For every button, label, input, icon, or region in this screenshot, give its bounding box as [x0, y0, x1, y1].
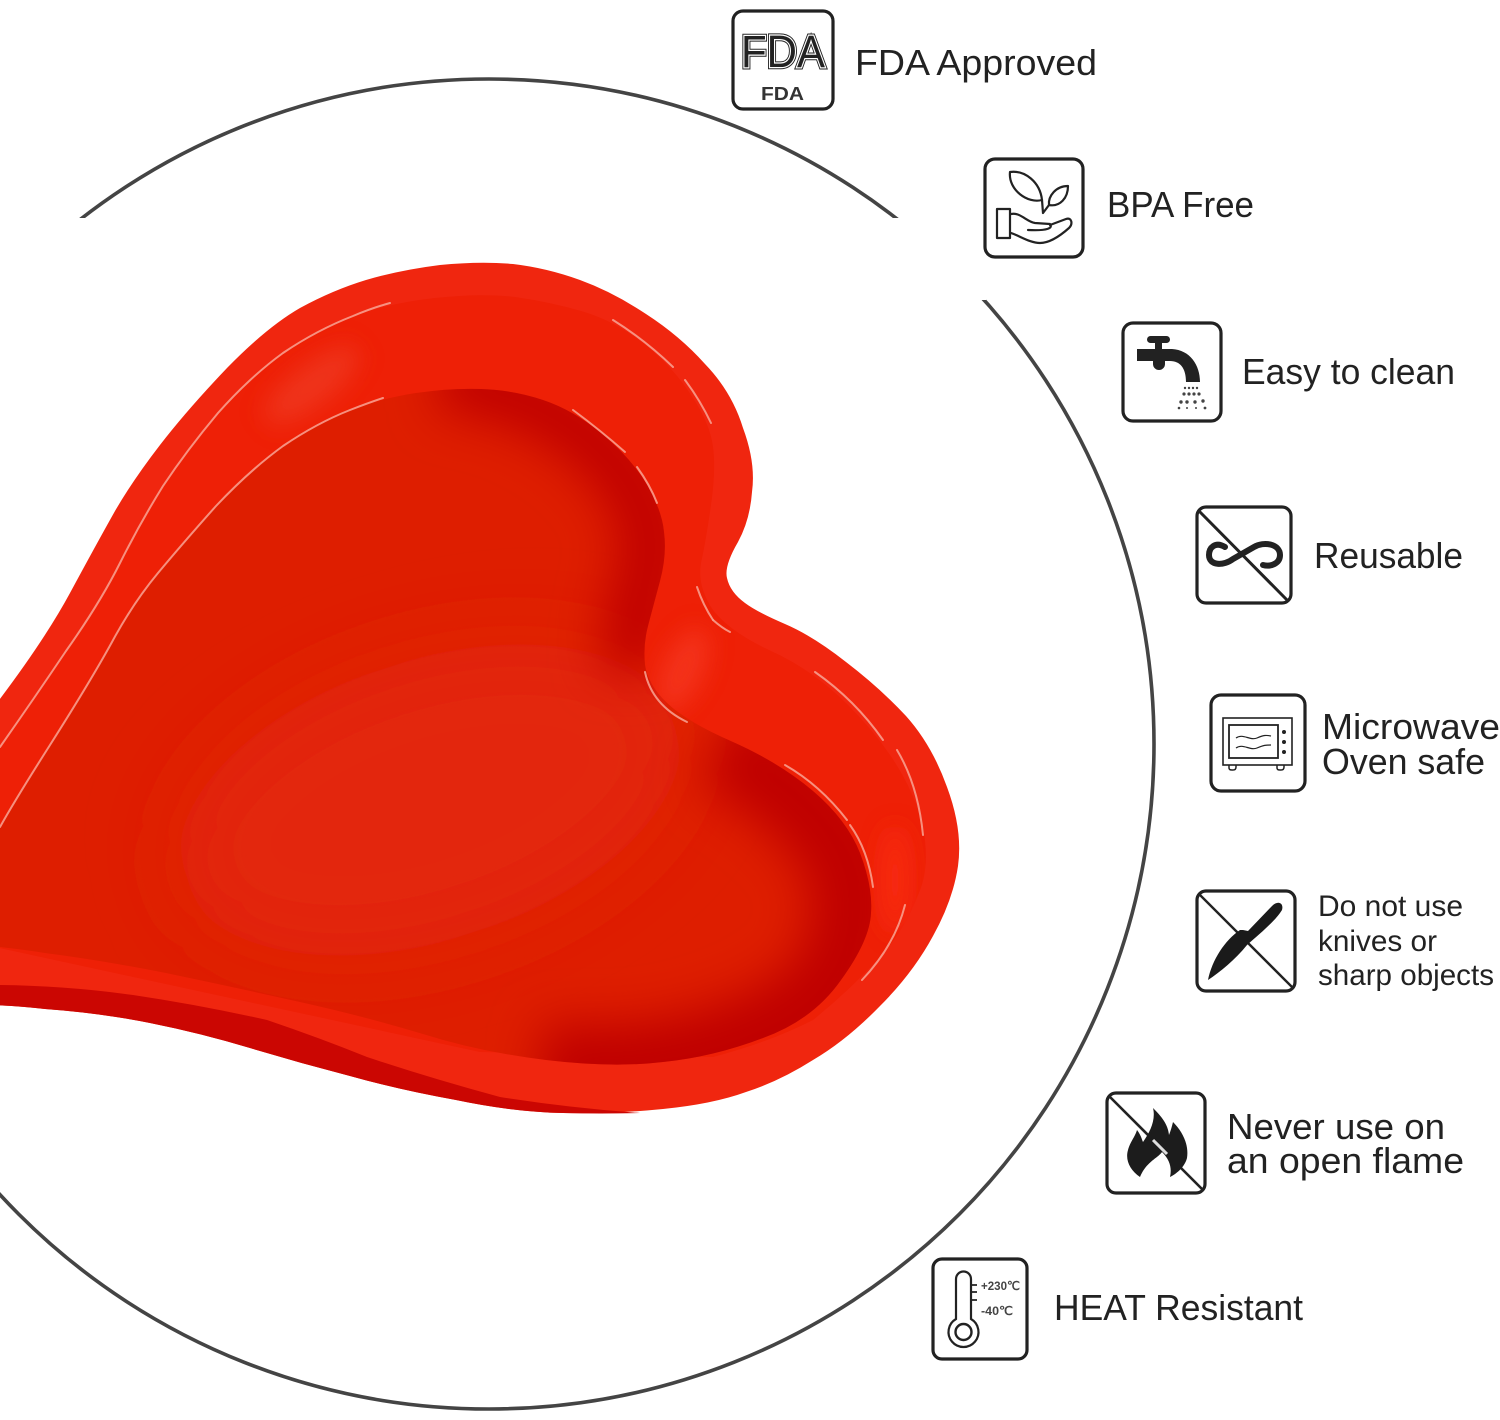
label: FDA Approved	[855, 42, 1097, 83]
label: Do not use	[1318, 890, 1463, 923]
label: sharp objects	[1318, 959, 1494, 992]
feature: HEAT Resistant	[933, 1259, 1303, 1359]
icon: water tap	[1123, 323, 1221, 421]
feature: Never use on an open flame	[1107, 1093, 1464, 1193]
icon: thermometer: +230℃	[981, 1279, 1020, 1293]
label: Microwave	[1322, 706, 1500, 747]
label: Oven safe	[1322, 741, 1485, 782]
white band interrupting the circle	[0, 218, 986, 300]
feature: Do not use knives	[1197, 890, 1494, 992]
wall highlights	[254, 334, 909, 935]
label: Easy to clean	[1242, 351, 1455, 392]
icon: thermometer: -40℃	[981, 1304, 1013, 1318]
rim highlight lines	[0, 303, 923, 980]
icon: crossed infinity	[1197, 507, 1291, 603]
feature: Reusable	[1197, 507, 1463, 603]
icon: FDA: FDA	[761, 84, 804, 104]
product circle outline	[0, 79, 1154, 1409]
icon: microwave	[1211, 695, 1305, 791]
label: knives or	[1318, 925, 1437, 958]
icon: FDA: FDA	[741, 26, 825, 77]
feature: Easy to clean	[1123, 323, 1455, 421]
label	[1318, 890, 1494, 992]
mold floor with soft shading	[0, 370, 900, 1090]
icon: FDA	[733, 11, 833, 109]
icon: plant in hand	[985, 159, 1083, 257]
feature: FDA Approved	[733, 11, 1097, 109]
feature: Microwave Oven safe	[1211, 695, 1500, 791]
heart-shaped silicone mold	[0, 263, 959, 1114]
label: Never use on	[1227, 1106, 1445, 1147]
label: BPA Free	[1107, 184, 1254, 225]
mold inner wall	[0, 295, 926, 1057]
label	[1227, 1106, 1464, 1181]
mold outer shell	[0, 263, 959, 1113]
icon: crossed knife	[1197, 891, 1295, 991]
label: HEAT Resistant	[1054, 1287, 1303, 1328]
feature: BPA Free	[985, 159, 1254, 257]
label: Reusable	[1314, 535, 1463, 576]
icon: crossed flame	[1107, 1093, 1205, 1193]
label: an open flame	[1227, 1140, 1464, 1181]
icon: thermometer	[933, 1259, 1027, 1359]
icon: FDA: FDA	[741, 26, 825, 77]
label	[1322, 706, 1500, 782]
mold dark lower edge	[0, 985, 640, 1114]
